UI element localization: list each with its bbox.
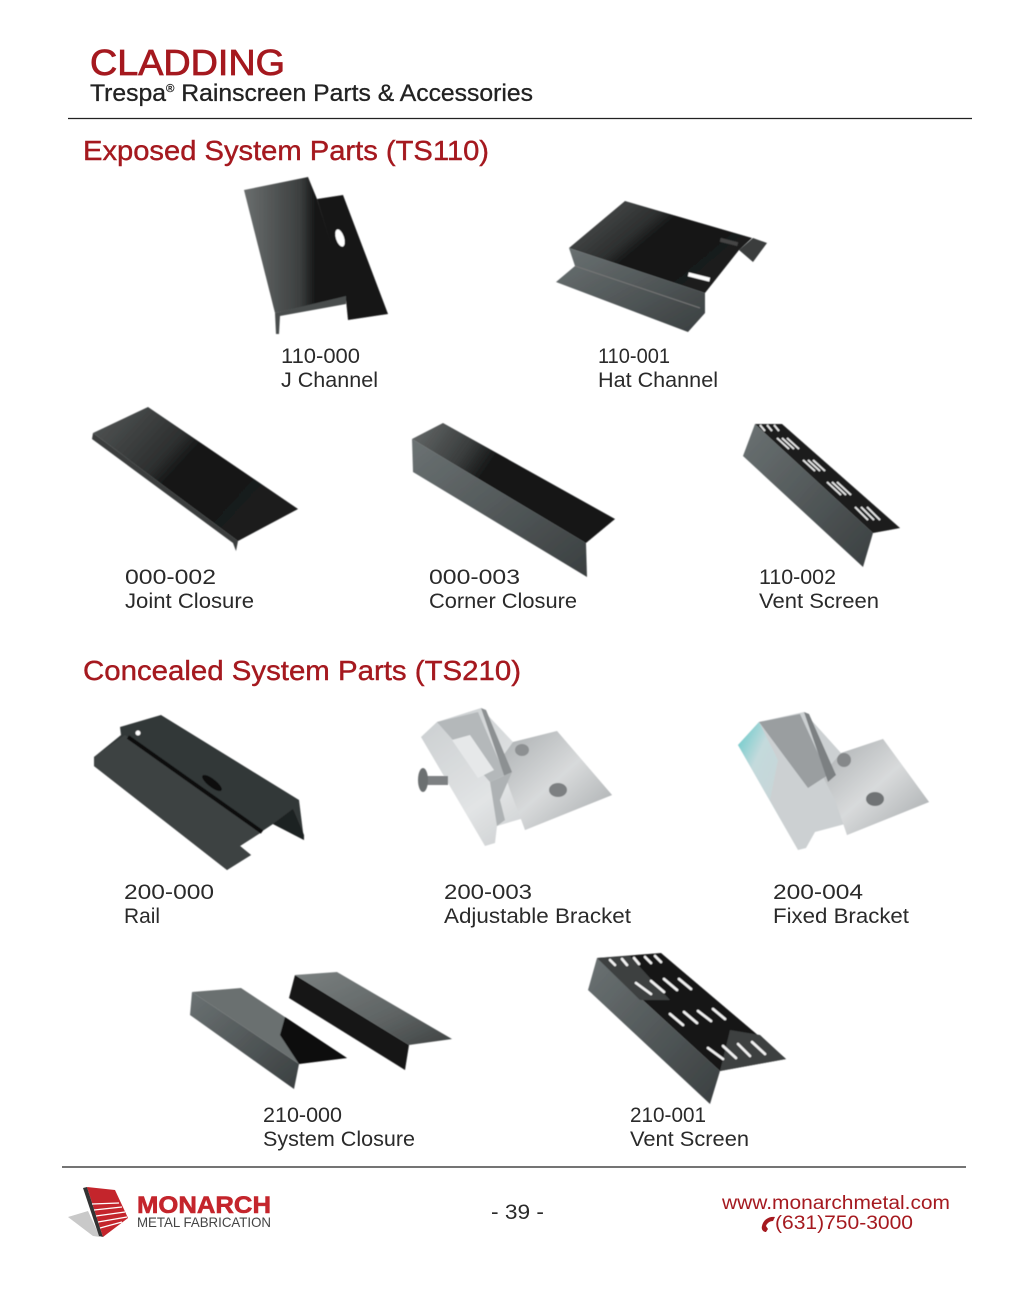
label: 110-001 Hat Channel bbox=[598, 345, 718, 392]
icon: phone handset bbox=[762, 1217, 775, 1232]
label: 200-003 Adjustable Bracket: 200-003 bbox=[444, 881, 532, 904]
label: 210-000 System Closure bbox=[263, 1104, 415, 1151]
label: 210-000 System Closure: System Closure bbox=[263, 1128, 415, 1151]
contact: website and phone: www.monarchmetal.com bbox=[721, 1193, 950, 1214]
part: vent screen 110-002 bbox=[743, 424, 900, 567]
label: 210-001 Vent Screen: Vent Screen bbox=[630, 1128, 749, 1151]
label: 200-000 Rail: 200-000 bbox=[124, 881, 214, 904]
label: 210-001 Vent Screen bbox=[630, 1104, 749, 1151]
label: 210-000 System Closure: 210-000 bbox=[263, 1104, 342, 1127]
label: 110-000 J Channel bbox=[281, 345, 378, 392]
label: 110-001 Hat Channel: 110-001 bbox=[598, 345, 670, 368]
label: 000-002 Joint Closure: 000-002 bbox=[125, 566, 216, 589]
part: fixed bracket bbox=[738, 712, 929, 850]
label: 000-003 Corner Closure: 000-003 bbox=[429, 566, 520, 589]
label: 200-004 Fixed Bracket: 200-004 bbox=[773, 881, 863, 904]
label: 200-003 Adjustable Bracket: Adjustable Bracket bbox=[444, 905, 631, 928]
part: adjustable bracket bbox=[418, 708, 612, 846]
label: 200-000 Rail: Rail bbox=[124, 905, 160, 928]
label: 200-004 Fixed Bracket: Fixed Bracket bbox=[773, 905, 909, 928]
title: CLADDING bbox=[90, 42, 285, 83]
label: 200-004 Fixed Bracket bbox=[773, 881, 909, 928]
icon: red panel logo mark bbox=[68, 1187, 128, 1237]
label: 110-002 Vent Screen bbox=[759, 566, 879, 613]
contact: website and phone bbox=[721, 1193, 950, 1234]
logo: Monarch Metal Fabrication bbox=[68, 1187, 271, 1237]
page number: - 39 - bbox=[491, 1201, 544, 1224]
logo: Monarch Metal Fabrication: MONARCH bbox=[137, 1192, 271, 1219]
subtitle: Trespa bbox=[90, 80, 164, 107]
label: 110-000 J Channel: J Channel bbox=[281, 369, 378, 392]
subtitle: ® bbox=[166, 83, 174, 95]
heading: concealed system parts: Concealed System Parts (TS210) bbox=[83, 655, 521, 686]
label: 200-003 Adjustable Bracket bbox=[444, 881, 631, 928]
part: vent screen 210-001 bbox=[588, 953, 786, 1104]
logo: Monarch Metal Fabrication: METAL FABRICATION bbox=[137, 1214, 271, 1230]
part: rail bbox=[94, 715, 304, 870]
label: 110-002 Vent Screen: Vent Screen bbox=[759, 590, 879, 613]
part: J channel bbox=[244, 177, 388, 334]
contact: website and phone: (631)750-3000 bbox=[775, 1213, 913, 1234]
part: corner closure bbox=[412, 423, 615, 577]
label: 000-002 Joint Closure bbox=[125, 566, 254, 613]
label: 210-001 Vent Screen: 210-001 bbox=[630, 1104, 706, 1127]
label: 000-003 Corner Closure: Corner Closure bbox=[429, 590, 577, 613]
part: hat channel bbox=[556, 201, 767, 332]
heading: exposed system parts: Exposed System Parts (TS110) bbox=[83, 135, 489, 166]
label: 000-002 Joint Closure: Joint Closure bbox=[125, 590, 254, 613]
label: 110-000 J Channel: 110-000 bbox=[281, 345, 360, 368]
label: 200-000 Rail bbox=[124, 881, 214, 928]
label: 110-001 Hat Channel: Hat Channel bbox=[598, 369, 718, 392]
subtitle: Rainscreen Parts & Accessories bbox=[174, 80, 533, 107]
label: 110-002 Vent Screen: 110-002 bbox=[759, 566, 836, 589]
part: system closure bbox=[190, 972, 452, 1089]
label: 000-003 Corner Closure bbox=[429, 566, 577, 613]
part: joint closure bbox=[92, 407, 298, 551]
